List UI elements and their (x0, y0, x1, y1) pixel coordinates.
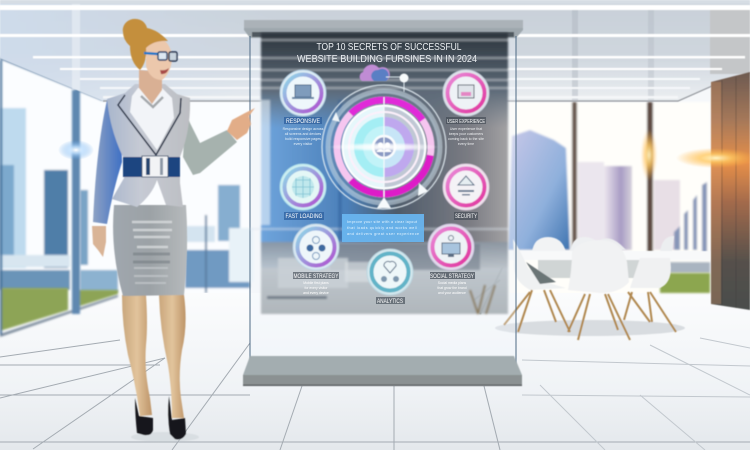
callout: description box (342, 214, 424, 242)
legs and heels (122, 295, 186, 439)
belt (123, 156, 180, 177)
glass display stand (243, 20, 523, 386)
label: user experience: every time (458, 142, 474, 146)
label: user experience: keeps your customers (449, 132, 483, 136)
right window with buildings (508, 102, 710, 294)
label: responsive: RESPONSIVE (286, 118, 321, 125)
label: user experience: USER EXPERIENCE (447, 119, 485, 125)
callout: description box: and delivers great user experience (347, 232, 419, 236)
skirt (113, 205, 187, 296)
icon: mobile strategy (293, 224, 339, 270)
glass pane (250, 34, 516, 374)
label: security (454, 212, 478, 220)
label: mobile strategy: for every visitor (304, 286, 328, 290)
label: mobile strategy: and every device (303, 291, 329, 295)
label: security: SECURITY (455, 214, 477, 220)
label: user experience: coming back to the site (448, 137, 484, 141)
floor shadow (131, 432, 199, 442)
ceiling with light strips (0, 0, 750, 101)
hair (123, 19, 168, 70)
left hand (92, 226, 106, 257)
callout: description box: that loads quickly and works well (347, 226, 417, 230)
label: social strategy: SOCIAL STRATEGY (430, 274, 474, 280)
icon: user experience (443, 70, 489, 116)
icon: social strategy (428, 224, 474, 270)
label: responsive: build responsive pages (285, 137, 321, 141)
neck and head (139, 38, 172, 104)
flare on left window (58, 140, 94, 160)
title: WEBSITE BUILDING FURSINES IN IN 2024 (297, 53, 477, 65)
jacket (107, 84, 190, 207)
left window with skyline (0, 58, 253, 298)
icon: responsive (280, 70, 326, 116)
dining table and chairs (474, 236, 710, 340)
pointing arm (183, 112, 237, 175)
jacket lapels (118, 95, 181, 155)
grass outside windows (0, 58, 710, 337)
label: responsive: all screens and devices (285, 132, 321, 136)
label: fast loading: FAST LOADING (286, 213, 322, 220)
callout: description box: Improve your site with a clear layout (347, 220, 417, 224)
label: mobile strategy: MOBILE STRATEGY (294, 274, 338, 280)
title (297, 41, 477, 65)
title: TOP 10 SECRETS OF SUCCESSFUL (316, 41, 462, 53)
label: mobile strategy: Mobile first plans (303, 281, 329, 285)
icon: cloud (360, 64, 408, 92)
side edges (250, 36, 516, 368)
left arm (93, 100, 122, 224)
label: user experience (446, 117, 486, 146)
icon: fast loading (280, 164, 326, 210)
label: social strategy: that grow the brand (437, 286, 467, 290)
label: social strategy (430, 272, 475, 295)
label: social strategy: and your audience (438, 291, 466, 295)
label: responsive: Responsive design across (283, 127, 324, 131)
label: analytics (376, 297, 405, 305)
icon: analytics (367, 249, 413, 295)
hand pointing (227, 108, 255, 140)
wood column (676, 72, 750, 310)
woman presenter (92, 19, 255, 442)
tiled floor (0, 293, 750, 450)
top cap (244, 20, 523, 38)
label: responsive: every visitor (294, 142, 313, 146)
necklace (141, 96, 163, 107)
label: analytics: ANALYTICS (377, 299, 403, 305)
base plinth (243, 356, 522, 386)
label: social strategy: Social media plans (438, 281, 467, 285)
glasses (144, 52, 177, 61)
blouse (130, 88, 174, 150)
label: user experience: User experience that (450, 127, 482, 131)
icon: security (443, 164, 489, 210)
central radial chart (322, 85, 446, 209)
panel: infographic screen (250, 33, 508, 314)
label: responsive (283, 117, 324, 146)
label: mobile strategy (293, 272, 339, 295)
